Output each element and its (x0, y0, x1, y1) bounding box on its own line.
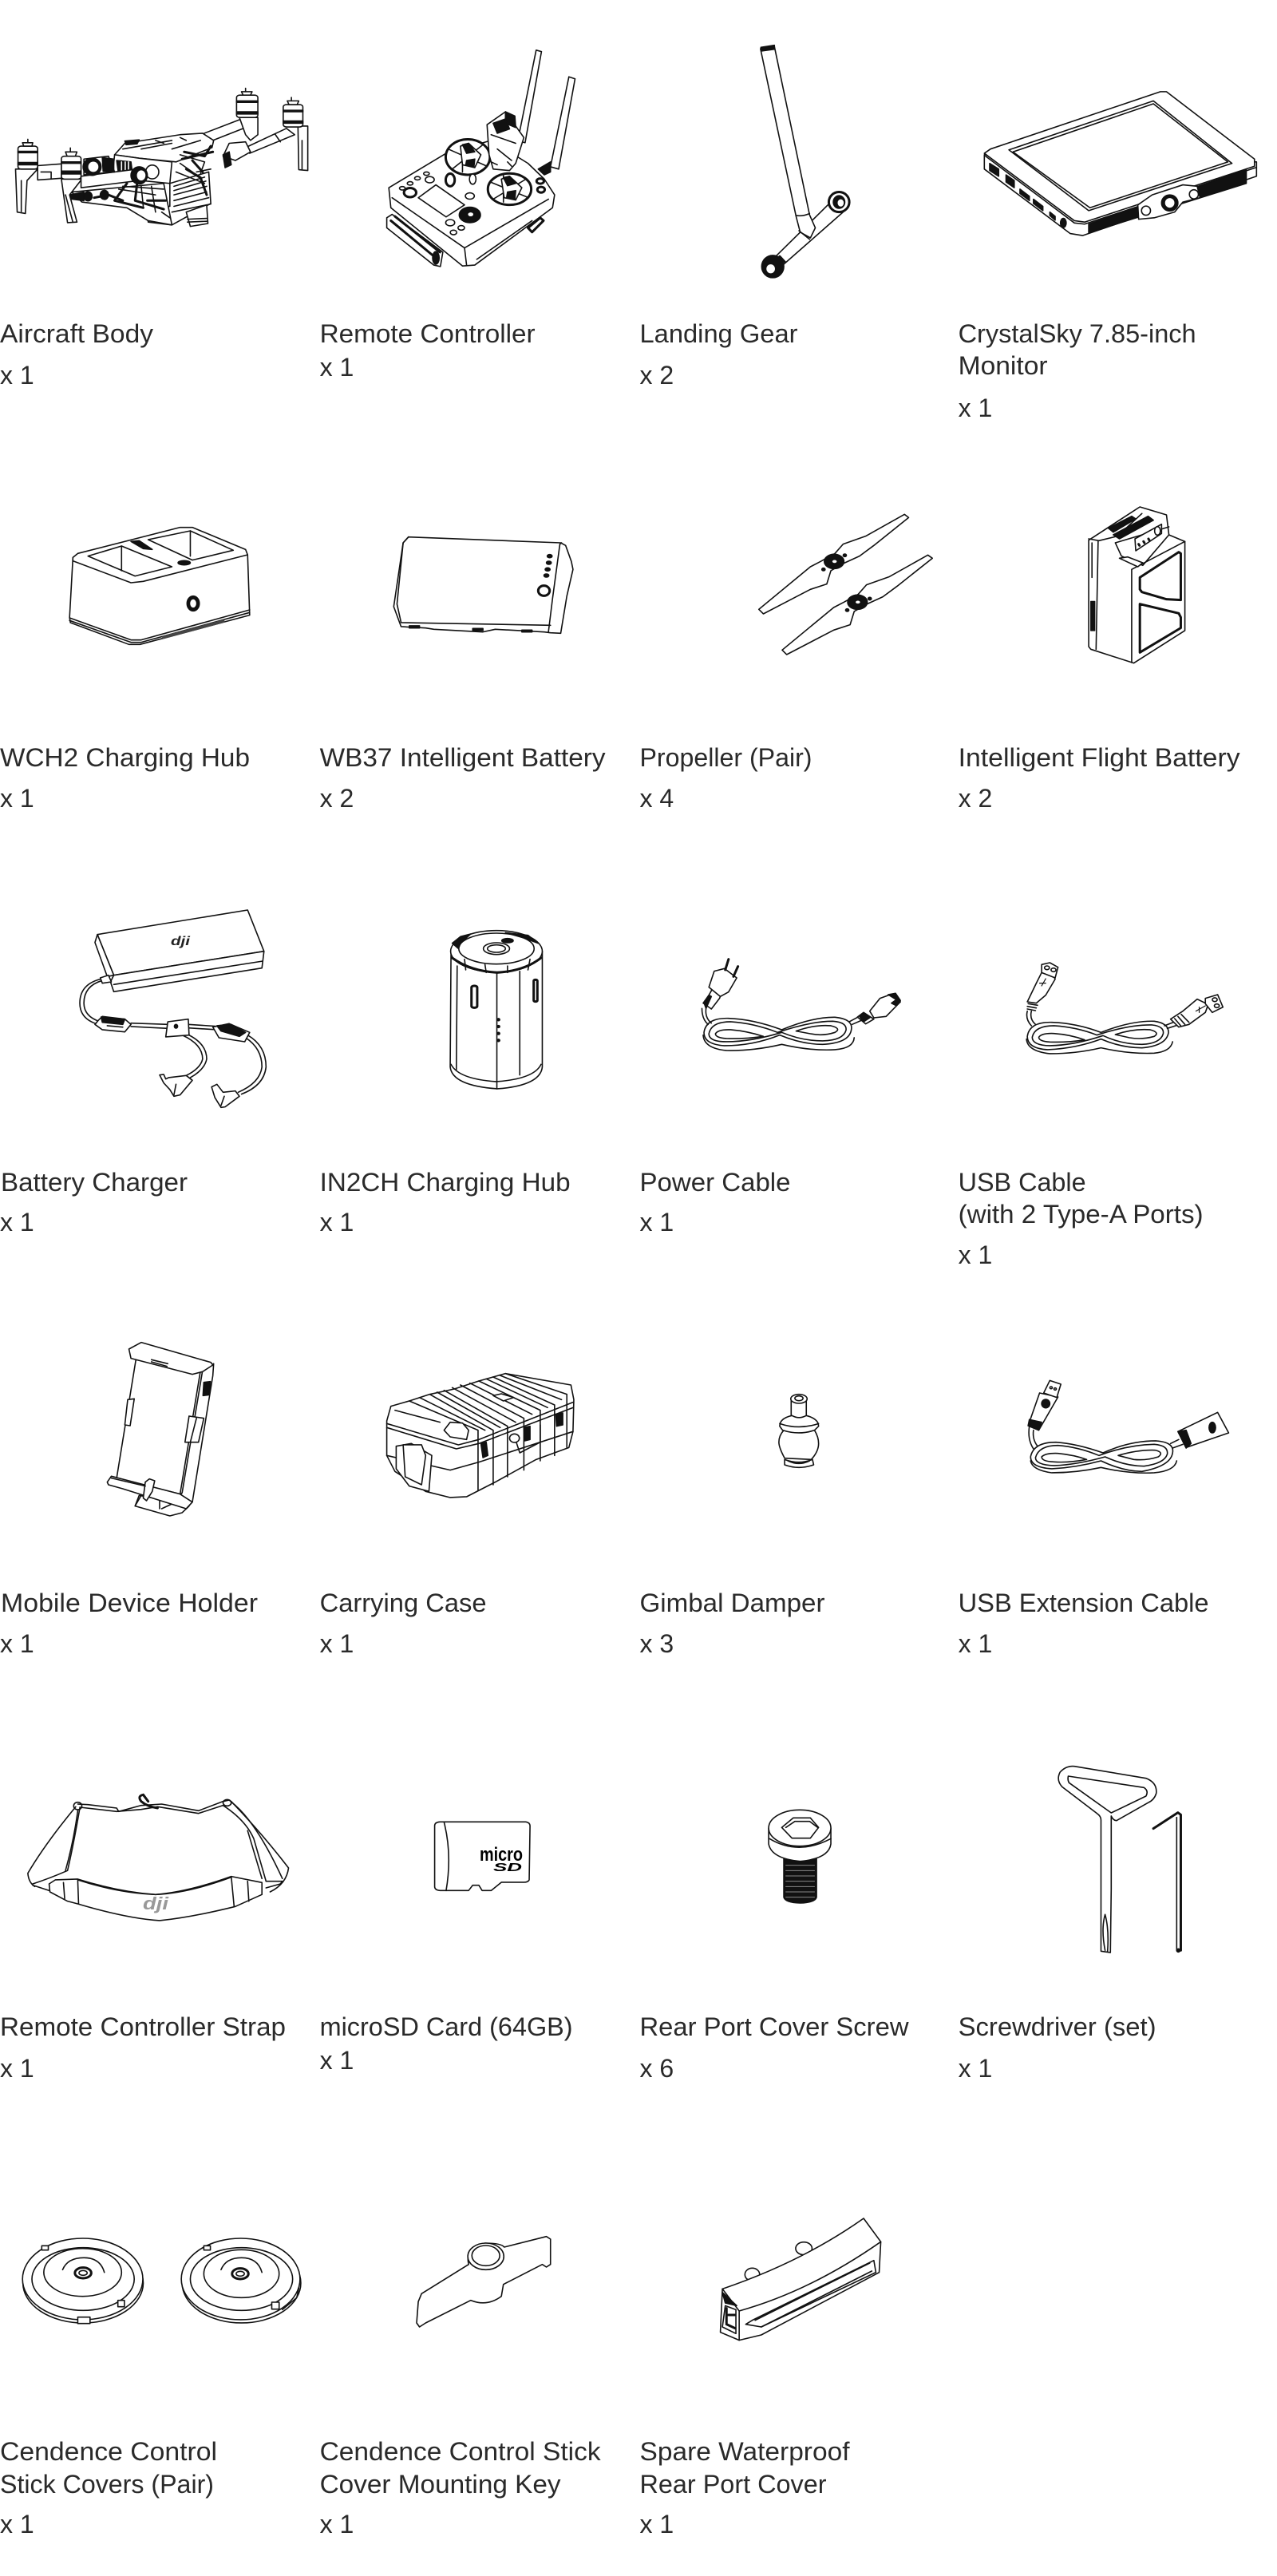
item: USB Cable (with 2 Type-A Ports) (959, 963, 1223, 1269)
icon: WB37 battery (393, 537, 573, 633)
name: Remote Controller Strap: Remote Controller Strap (0, 2012, 286, 2041)
quantity: x 1 (320, 2510, 354, 2538)
icon: mobile device holder (107, 1343, 214, 1516)
quantity: x 1 (640, 1208, 674, 1237)
item: Remote Controller (320, 50, 575, 382)
icon: rear port cover (721, 2218, 881, 2341)
quantity: x 1 (959, 2054, 992, 2083)
item: Cendence Control Stick Covers (Pair) (0, 2238, 301, 2538)
item: CrystalSky Monitor (959, 92, 1256, 422)
icon: battery charger (80, 910, 266, 1107)
name: Carrying Case: Carrying Case (320, 1589, 487, 1617)
quantity: x 1 (0, 2510, 34, 2538)
item: Battery Charger (0, 910, 266, 1237)
name: WB37 Intelligent Battery: WB37 Intelligent Battery (320, 743, 606, 772)
item: Rear Port Cover Screw (640, 1810, 909, 2083)
quantity: x 1 (959, 1629, 992, 1658)
item: WCH2 Charging Hub (0, 528, 250, 813)
item: Aircraft Body (0, 89, 308, 390)
icon: IN2CH charging hub (450, 931, 542, 1089)
name: Spare Waterproof Rear Port Cover (640, 2437, 850, 2499)
item: USB Extension Cable (959, 1380, 1228, 1658)
name: CrystalSky 7.85-inch Monitor (959, 319, 1196, 380)
icon: CrystalSky monitor (984, 92, 1256, 235)
item: Remote Controller Strap (0, 1794, 289, 2083)
icon: flight battery (1089, 507, 1185, 663)
icon: power cable (702, 960, 900, 1051)
icon: remote controller strap: dji (143, 1893, 169, 1913)
icon: propellers (759, 514, 932, 655)
name: Aircraft Body: Aircraft Body (0, 319, 153, 348)
quantity: x 1 (959, 394, 992, 422)
icon: microSD card: SD (493, 1861, 522, 1874)
quantity: x 2 (640, 361, 674, 390)
item: Power Cable (640, 960, 900, 1237)
name: Cendence Control Stick Cover Mounting Key (320, 2437, 602, 2499)
item: Landing Gear (640, 46, 849, 390)
item: Carrying Case (320, 1374, 574, 1658)
name: Cendence Control Stick Covers (Pair): Stick Covers (Pair) (0, 2470, 214, 2499)
item: WB37 Intelligent Battery (320, 537, 606, 813)
name: Landing Gear: Landing Gear (640, 319, 798, 348)
quantity: x 1 (320, 1208, 354, 1237)
name: Power Cable: Power Cable (640, 1168, 790, 1197)
name: Remote Controller: Remote Controller (320, 319, 536, 348)
icon: gimbal damper (779, 1395, 819, 1467)
icon: battery charger: dji (171, 935, 191, 948)
name: Propeller (Pair): Propeller (Pair) (640, 743, 812, 772)
name: IN2CH Charging Hub: IN2CH Charging Hub (320, 1168, 571, 1197)
name: WCH2 Charging Hub: WCH2 Charging Hub (0, 743, 250, 772)
name: USB Cable (with 2 Type-A Ports): USB Cable (959, 1168, 1086, 1197)
quantity: x 1 (320, 2046, 354, 2075)
name: Battery Charger: Battery Charger (1, 1168, 188, 1197)
item: Gimbal Damper (640, 1395, 825, 1658)
quantity: x 1 (320, 353, 354, 382)
quantity: x 1 (320, 1629, 354, 1658)
item: Cendence Control Stick Cover Mounting Key (320, 2237, 602, 2538)
icon: screwdriver and hex key (1058, 1767, 1180, 1953)
icon: remote controller (387, 50, 575, 267)
quantity: x 1 (0, 784, 34, 813)
quantity: x 1 (959, 1241, 992, 1269)
item: Intelligent Flight Battery (959, 507, 1240, 813)
name: Screwdriver (set): Screwdriver (set) (959, 2012, 1156, 2041)
name: Gimbal Damper: Gimbal Damper (640, 1589, 825, 1617)
name: Intelligent Flight Battery: Intelligent Flight Battery (959, 743, 1240, 772)
quantity: x 1 (0, 1208, 34, 1237)
quantity: x 3 (640, 1629, 674, 1658)
quantity: x 1 (0, 361, 34, 390)
quantity: x 1 (0, 2054, 34, 2083)
item: IN2CH Charging Hub (320, 931, 571, 1237)
icon: microSD card: micro (480, 1844, 523, 1866)
name: Cendence Control Stick Cover Mounting Key: Cendence Control Stick (320, 2437, 602, 2466)
icon: microSD card (435, 1822, 530, 1890)
icon: carrying case (387, 1374, 574, 1498)
name: microSD Card (64GB): microSD Card (64GB) (320, 2012, 573, 2041)
icon: remote controller strap (28, 1794, 289, 1921)
quantity: x 1 (640, 2510, 674, 2538)
name: Rear Port Cover Screw: Rear Port Cover Screw (640, 2012, 909, 2041)
quantity: x 4 (640, 784, 674, 813)
icon: mounting key (417, 2237, 551, 2327)
name: USB Cable (with 2 Type-A Ports) (959, 1168, 1204, 1229)
item: Spare Waterproof Rear Port Cover (640, 2218, 881, 2538)
name: Cendence Control Stick Covers (Pair) (0, 2437, 217, 2499)
icon: aircraft body (15, 89, 308, 227)
name: CrystalSky 7.85-inch Monitor: Monitor (959, 351, 1048, 380)
name: Cendence Control Stick Covers (Pair): Cendence Control (0, 2437, 217, 2466)
name: USB Cable (with 2 Type-A Ports): (with 2 Type-A Ports) (959, 1200, 1204, 1229)
name: CrystalSky 7.85-inch Monitor: CrystalSky 7.85-inch (959, 319, 1196, 348)
quantity: x 6 (640, 2054, 674, 2083)
name: Spare Waterproof Rear Port Cover: Spare Waterproof (640, 2437, 850, 2466)
name: Mobile Device Holder: Mobile Device Holder (1, 1589, 258, 1617)
item: Propeller (Pair) (640, 514, 932, 813)
icon: landing gear (761, 46, 849, 278)
item: Mobile Device Holder (0, 1343, 258, 1658)
icon: USB extension cable (1028, 1380, 1228, 1473)
item: Screwdriver (set) (959, 1767, 1180, 2083)
quantity: x 2 (320, 784, 354, 813)
name: Cendence Control Stick Cover Mounting Key: Cover Mounting Key (320, 2470, 561, 2499)
name: Spare Waterproof Rear Port Cover: Rear Port Cover (640, 2470, 827, 2499)
item: microSD Card (64GB) (320, 1822, 573, 2075)
icon: stick covers (22, 2238, 301, 2324)
quantity: x 1 (0, 1629, 34, 1658)
icon: USB cable (1026, 963, 1223, 1054)
name: USB Extension Cable: USB Extension Cable (959, 1589, 1209, 1617)
icon: screw (769, 1810, 831, 1903)
quantity: x 2 (959, 784, 992, 813)
icon: WCH2 charging hub (69, 528, 250, 644)
